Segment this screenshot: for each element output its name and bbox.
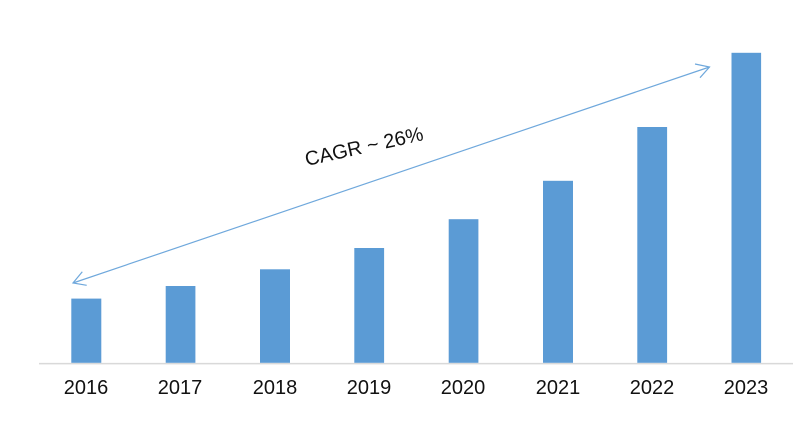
label: 2021: 2021 — [536, 377, 580, 399]
label: 2020: 2020 — [441, 377, 485, 399]
bar: 2019 — [354, 248, 384, 363]
bar: 2018 — [260, 269, 290, 363]
bar: 2017 — [166, 286, 195, 363]
bar: 2016 — [71, 299, 101, 363]
label: 2022: 2022 — [630, 377, 674, 399]
arrow: CAGR growth double-headed — [73, 64, 710, 285]
bar: 2021 — [543, 181, 573, 363]
bar: 2022 — [637, 127, 667, 363]
label: 2017: 2017 — [158, 377, 202, 399]
year labels — [64, 377, 768, 399]
label: 2016: 2016 — [64, 377, 108, 399]
bar: 2020 — [449, 219, 478, 363]
label: 2023: 2023 — [724, 377, 768, 399]
label: 2018: 2018 — [253, 377, 297, 399]
x axis line — [39, 363, 793, 365]
bars — [71, 53, 761, 363]
bar: 2023 — [732, 53, 761, 363]
label: 2019: 2019 — [347, 377, 391, 399]
CAGR label: CAGR ~ 26% — [303, 123, 426, 171]
